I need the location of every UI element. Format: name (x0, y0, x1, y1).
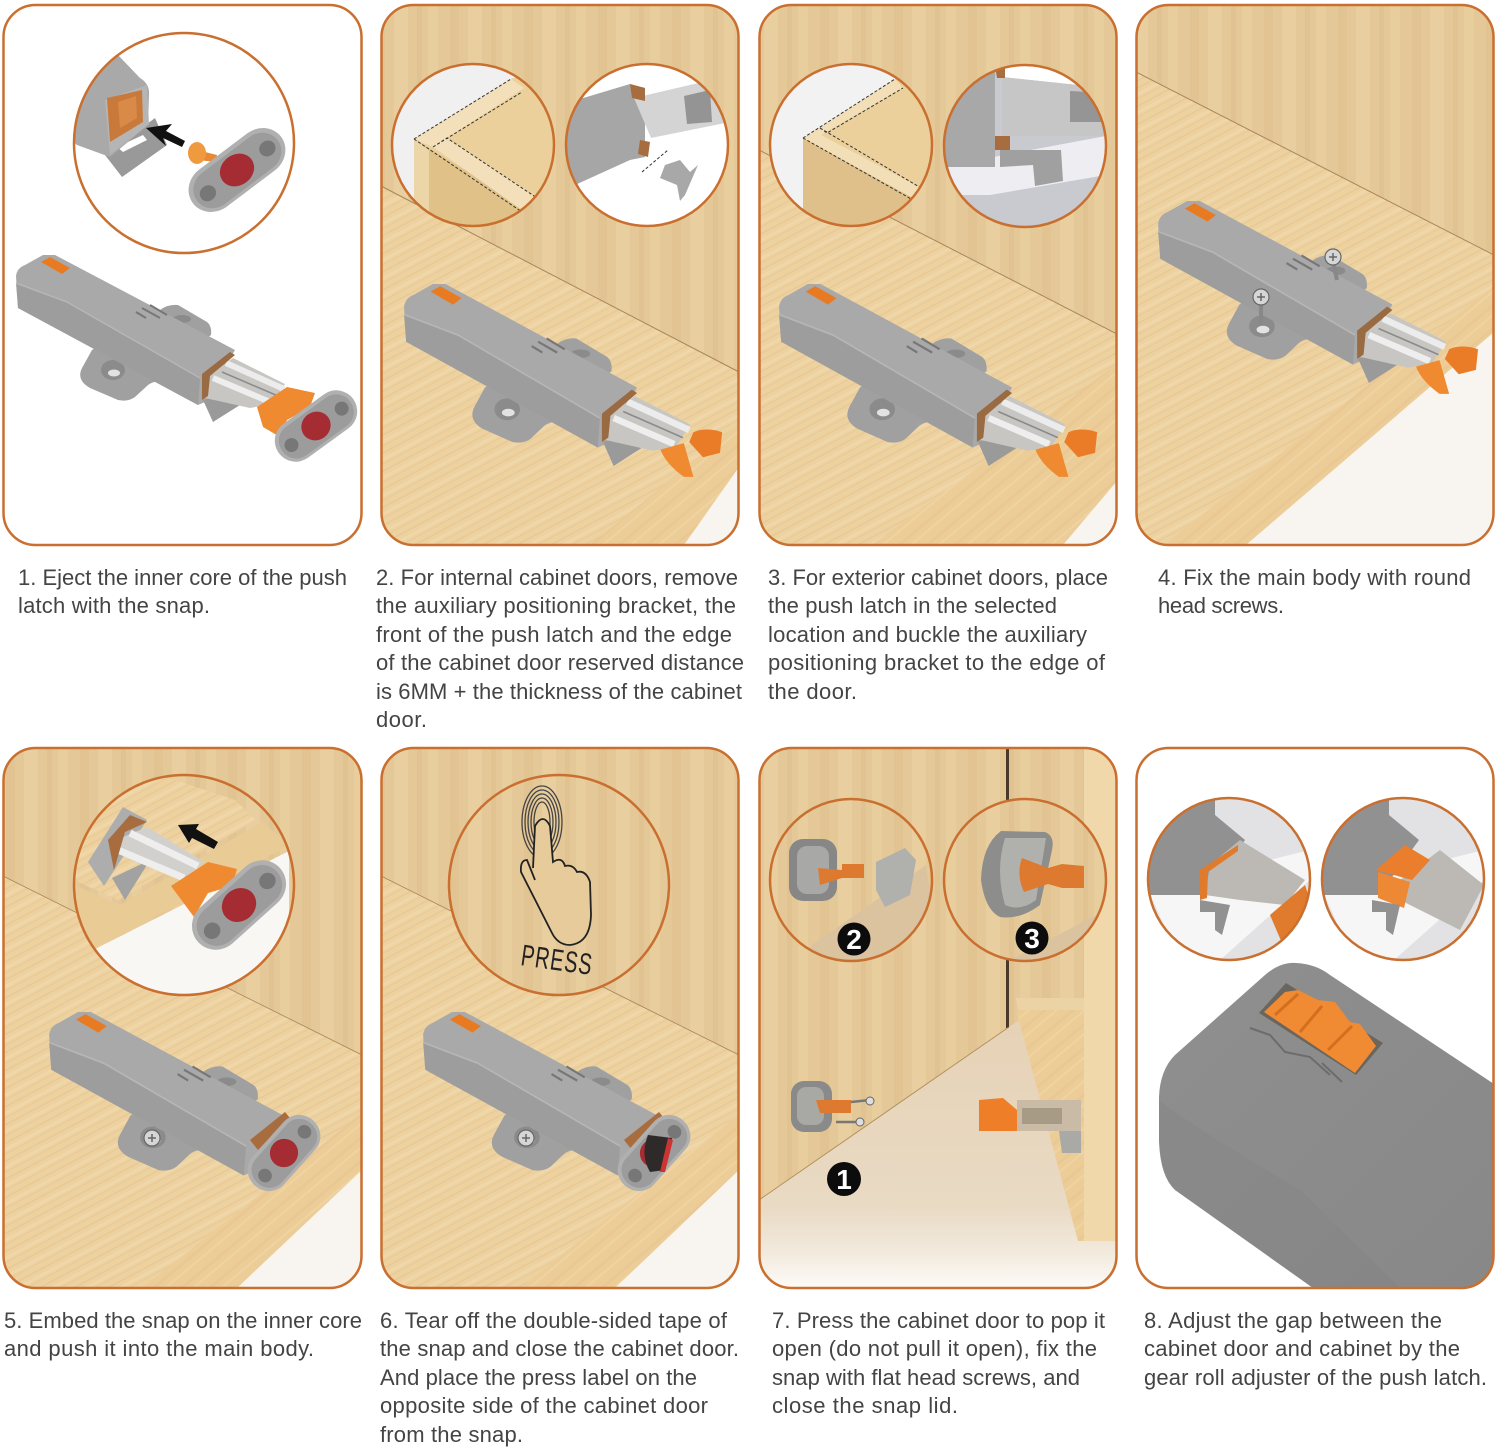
inset ring (944, 65, 1106, 227)
caption 1: latch with the snap. (18, 593, 210, 618)
panel 1 border (4, 5, 362, 545)
panel 1 background (4, 5, 362, 545)
caption 2: of the cabinet door reserved distance (376, 650, 744, 675)
inset ring (944, 799, 1106, 961)
panel 3 border (760, 5, 1116, 545)
caption 2: is 6MM + the thickness of the cabinet (376, 679, 742, 704)
caption 8: gear roll adjuster of the push latch. (1144, 1365, 1487, 1390)
inset: snap on core (74, 775, 296, 995)
caption 2: 2. For internal cabinet doors, remove (376, 565, 738, 590)
inset ring (770, 799, 932, 961)
panel 7 cabinet scene (759, 748, 1117, 1288)
snap base with screws (791, 1081, 874, 1132)
caption 7: snap with flat head screws, and (772, 1365, 1080, 1390)
panel 3 wood scene (759, 5, 1117, 545)
panel 3: external door position (759, 5, 1117, 545)
number badge 3: 3 (1024, 923, 1040, 954)
panel 6 wood scene (381, 748, 739, 1288)
number badge 3 (1016, 922, 1048, 954)
inset: adjuster cap on (1322, 798, 1484, 960)
arrow (178, 824, 218, 849)
inset ring (74, 775, 294, 995)
panel 1: eject inner core (4, 5, 366, 545)
orange gear wheels (1264, 990, 1376, 1073)
panel 6 border (382, 748, 738, 1288)
screws (1253, 249, 1341, 325)
caption 5: 5. Embed the snap on the inner core (4, 1308, 362, 1333)
inset ring (74, 33, 294, 253)
number badge 1 (827, 1162, 861, 1196)
inset: press label (449, 775, 669, 995)
inset ring (1148, 798, 1310, 960)
caption 2: the auxiliary positioning bracket, the (376, 593, 736, 618)
caption 1: 1. Eject the inner core of the push (18, 565, 347, 590)
inset: snap with lid (981, 802, 1105, 960)
latch with snap closed (423, 1012, 699, 1200)
caption 2: door. (376, 707, 427, 732)
inset: inner door corner (393, 65, 534, 225)
inset: core open (1148, 798, 1310, 960)
panel 4 wood scene (1136, 5, 1494, 545)
inset: snap removed from core (75, 56, 286, 212)
panel 4 border (1136, 5, 1494, 545)
panel 7 border (760, 748, 1116, 1288)
panel 5 border (4, 748, 362, 1288)
caption 3: the push latch in the selected (768, 593, 1057, 618)
caption 7: open (do not pull it open), fix the (772, 1336, 1097, 1361)
panel 5 wood scene (3, 748, 362, 1288)
latch with snap (16, 255, 366, 470)
panel 6: press label (381, 748, 739, 1288)
panel 2 border (382, 5, 738, 545)
caption 3: location and buckle the auxiliary (768, 622, 1087, 647)
caption 6: the snap and close the cabinet door. (380, 1336, 739, 1361)
caption 7: 7. Press the cabinet door to pop it (772, 1308, 1105, 1333)
number badge 2 (838, 922, 870, 956)
caption 6: from the snap. (380, 1422, 523, 1447)
caption 8: 8. Adjust the gap between the (1144, 1308, 1442, 1333)
inset ring (1322, 798, 1484, 960)
inset: outer door corner (771, 65, 920, 225)
caption 4: 4. Fix the main body with round (1158, 565, 1471, 590)
caption 6: opposite side of the cabinet door (380, 1393, 708, 1418)
latch from above (979, 1098, 1081, 1153)
panel 8: gear roll adjuster (1136, 748, 1494, 1288)
caption 5: and push it into the main body. (4, 1336, 314, 1361)
inset ring (770, 64, 932, 226)
enlarged adjuster body (1159, 963, 1494, 1288)
arrow (146, 124, 185, 147)
panel 8 border (1136, 748, 1494, 1288)
panel 4: screws (1136, 5, 1494, 545)
number badge 1: 1 (836, 1164, 852, 1195)
caption 3: the door. (768, 679, 857, 704)
caption 6: And place the press label on the (380, 1365, 697, 1390)
caption 2: front of the push latch and the edge (376, 622, 732, 647)
caption 7: close the snap lid. (772, 1393, 958, 1418)
panel 5: embed snap (3, 748, 362, 1288)
caption 3: positioning bracket to the edge of (768, 650, 1106, 675)
inset: bracket on door edge (945, 66, 1105, 226)
press label text: PRESS (519, 939, 595, 982)
inset ring (566, 64, 728, 226)
latch (779, 284, 1097, 477)
hand icon (521, 819, 591, 945)
fingerprint (522, 786, 562, 858)
latch with screws (1158, 201, 1478, 394)
caption 8: cabinet door and cabinet by the (1144, 1336, 1460, 1361)
panel 2: internal door position (381, 5, 739, 545)
number badge 2: 2 (846, 924, 862, 955)
caption 6: 6. Tear off the double-sided tape of (380, 1308, 728, 1333)
panel 2 wood scene (381, 5, 739, 545)
panel 7: fix snap (759, 748, 1117, 1288)
caption 3: 3. For exterior cabinet doors, place (768, 565, 1108, 590)
inset ring (392, 64, 554, 226)
latch (404, 284, 722, 477)
inset: bracket removed (567, 65, 727, 225)
panel 8 background (1136, 748, 1494, 1288)
caption 4: head screws. (1158, 593, 1284, 618)
inset: snap without lid (789, 839, 930, 960)
latch with snap (49, 1012, 329, 1200)
